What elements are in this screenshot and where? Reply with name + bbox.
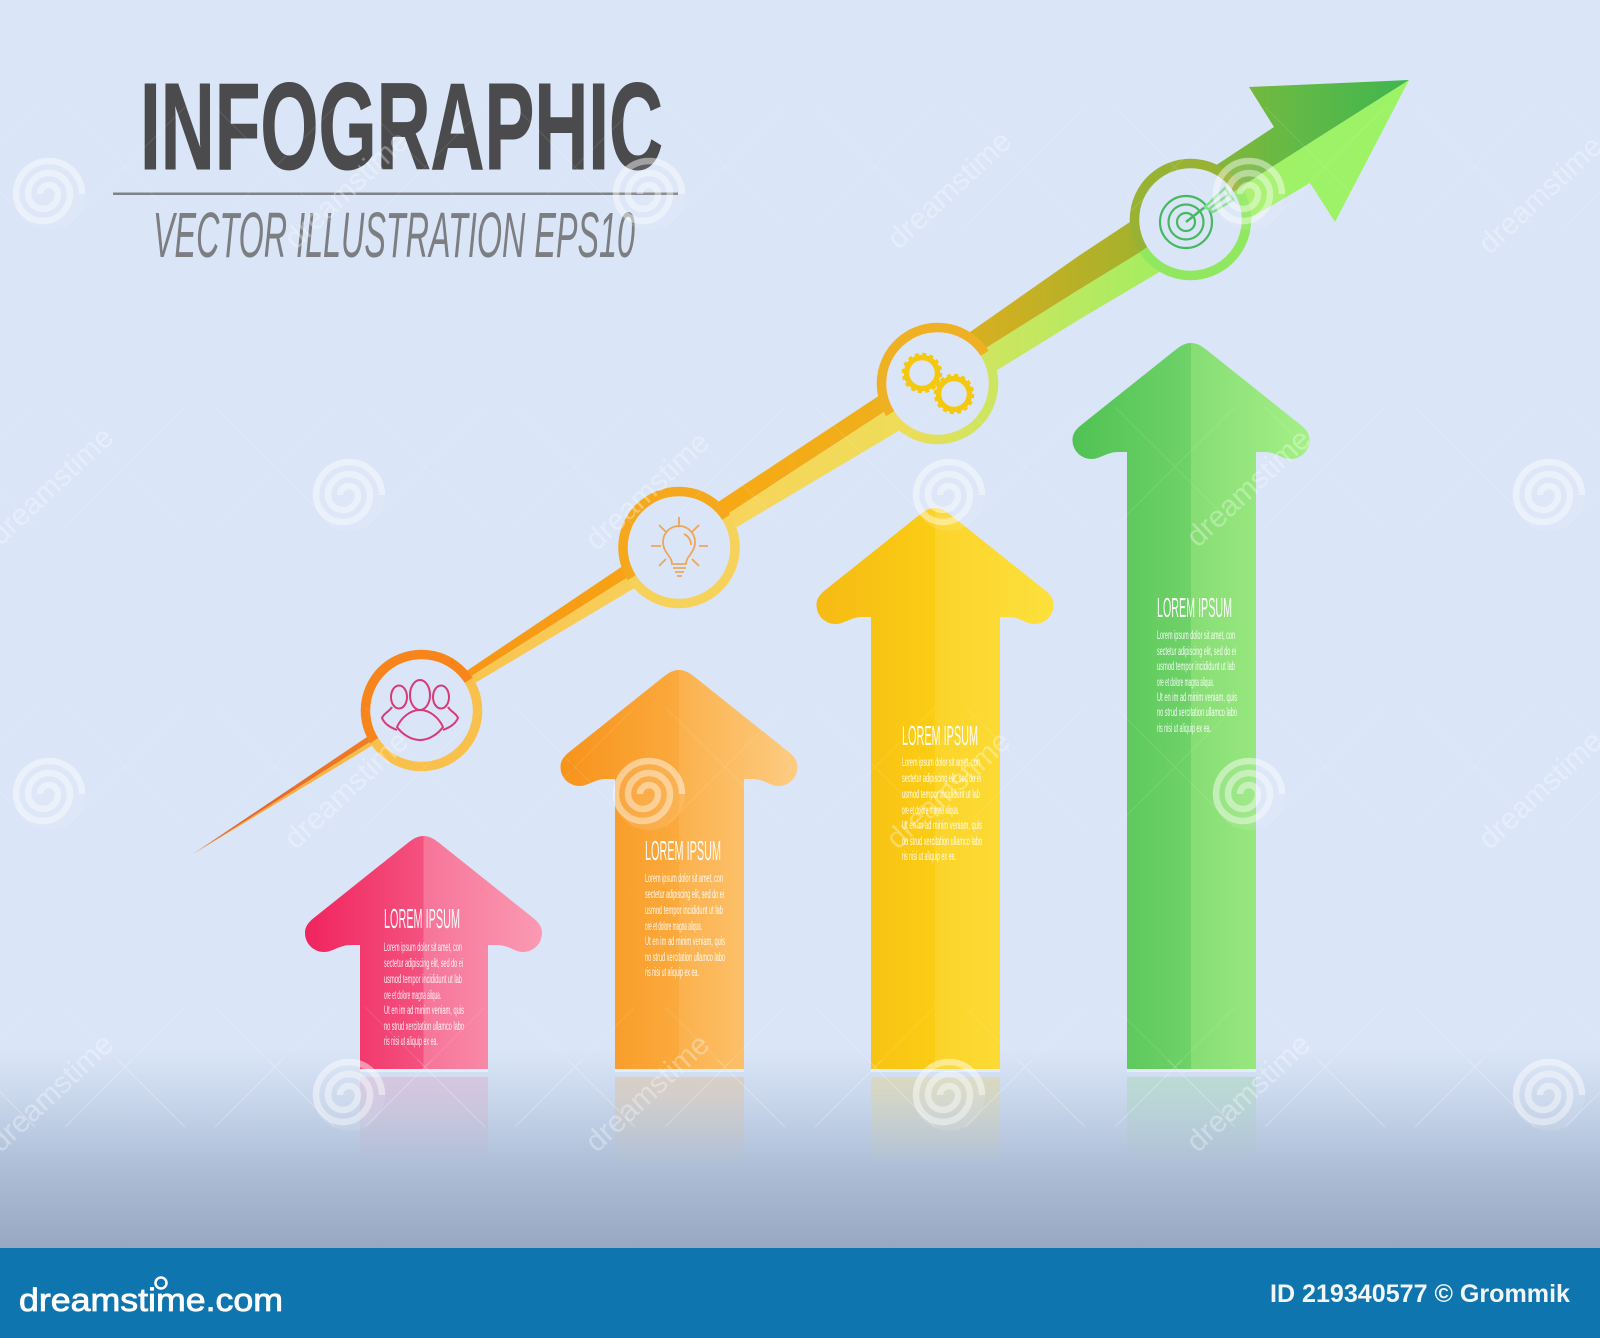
step arrow 3: yellow: no strud xercitation ullamco labo [902,836,982,848]
milestone 2: idea [623,491,735,604]
step arrow 1: pink: no strud xercitation ullamco labo [384,1021,464,1033]
step arrow 3: yellow: Ut en im ad minim veniam, quis [902,820,982,832]
text: usmod tempor incididunt ut lab [902,789,980,801]
watermark overlay: dreamstime [881,125,1018,256]
step arrow 3: yellow [816,508,1054,1167]
image id and credit: ID 219340577 © Grommik [1270,1280,1570,1308]
step arrow 1: pink [305,836,542,1167]
step arrow 2: orange: Ut en im ad minim veniam, quis [645,936,725,948]
watermark overlay: dreamstime [278,125,415,256]
arrow shape [1072,343,1310,1069]
subtitle: VECTOR ILLUSTRATION EPS10 [153,199,635,271]
text: usmod tempor incididunt ut lab [1157,661,1235,673]
step arrow 1: pink: LOREM IPSUM [384,903,460,934]
milestone 3: gears [881,327,994,440]
text [1157,592,1237,735]
growth arrow [193,80,1409,854]
reflection [871,1077,1000,1167]
text: ris nisi ut aliquip ex ea. [902,851,956,863]
watermark overlay: dreamstime [880,725,1017,856]
text: ris nisi ut aliquip ex ea. [1157,723,1211,735]
reflection [1127,1077,1256,1167]
text: ris nisi ut aliquip ex ea. [645,967,699,979]
reflection [615,1077,744,1167]
icon: people [382,680,458,740]
step arrow 4: green: sectetur adipiscing elit, sed do ei [1157,646,1236,658]
step arrow 2: orange [560,670,798,1167]
step arrow 4: green: no strud xercitation ullamco labo [1157,707,1237,719]
icon: light bulb [651,517,708,576]
text [902,720,982,863]
arrow light half [193,80,1409,854]
milestone 1: team [365,654,478,767]
watermark overlay: dreamstime [579,426,716,557]
text [384,903,464,1048]
text: ore et dolore magna aliqua. [645,921,702,933]
step arrow 2: orange: sectetur adipiscing elit, sed do ei [645,889,724,901]
step arrow 2: orange: no strud xercitation ullamco labo [645,952,725,964]
step arrow 4: green: Ut en im ad minim veniam, quis [1157,692,1237,704]
step arrow 1: pink: sectetur adipiscing elit, sed do ei [384,958,463,970]
step arrow 3: yellow: sectetur adipiscing elit, sed do ei [902,773,981,785]
title rule [113,192,678,195]
milestone 4: target [1134,163,1247,276]
watermark overlay: dreamstime [1180,423,1317,554]
text [645,835,725,979]
step arrow 1: pink: Ut en im ad minim veniam, quis [384,1005,464,1017]
step arrow 4: green: Lorem ipsum dolor sit amet, con [1157,630,1235,642]
text: ore et dolore magna aliqua. [902,805,959,817]
icon: target [1160,188,1233,248]
reflection [360,1077,488,1167]
watermark overlay: dreamstime [579,1028,716,1159]
step arrow 1: pink: Lorem ipsum dolor sit amet, con [384,942,462,954]
arrow shape [305,836,542,1069]
title block [113,59,678,271]
step arrow 2: orange: LOREM IPSUM [645,835,721,866]
footer bar [0,1248,1600,1338]
arrow shape [816,508,1054,1069]
arrow dark half [193,80,1409,854]
arrow shape [560,670,798,1069]
text: ore et dolore magna aliqua. [384,990,441,1002]
watermark overlay: dreamstime [1180,1028,1317,1159]
title: INFOGRAPHIC [140,59,663,196]
text: usmod tempor incididunt ut lab [384,974,462,986]
text: ris nisi ut aliquip ex ea. [384,1036,438,1048]
icon: gears [904,354,972,412]
text: usmod tempor incididunt ut lab [645,905,723,917]
step arrow 2: orange: Lorem ipsum dolor sit amet, con [645,873,723,885]
step arrow 4: green [1072,343,1310,1167]
watermark overlay: dreamstime [278,725,415,856]
step arrow 3: yellow: LOREM IPSUM [902,720,978,751]
logo spiral [156,1278,166,1288]
step arrow 3: yellow: Lorem ipsum dolor sit amet, con [902,757,980,769]
footer logo: dreamstime.com [19,1282,283,1318]
step arrow 4: green: LOREM IPSUM [1157,592,1232,623]
text: ore et dolore magna aliqua. [1157,677,1214,689]
